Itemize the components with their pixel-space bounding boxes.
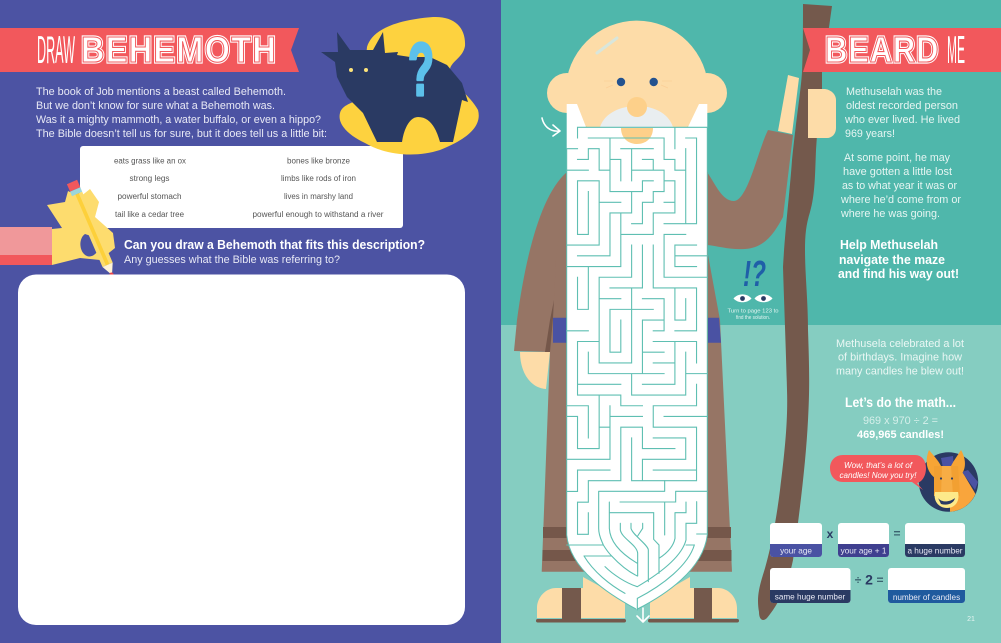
box: your age xyxy=(770,523,822,557)
muzzle xyxy=(935,492,959,508)
left sole xyxy=(536,619,626,622)
intro text: But we don’t know for sure what a Behemoth was. xyxy=(36,100,275,112)
text: about Methuselah: Methuselah was the xyxy=(846,86,942,98)
box: your age: your age xyxy=(780,546,812,556)
panel: description list xyxy=(80,146,403,228)
right strap xyxy=(694,588,712,619)
box: a huge number: a huge number xyxy=(907,546,963,556)
panel: left page background xyxy=(0,0,501,643)
icon: exclamation and question: !? xyxy=(743,253,766,294)
intro text: The Bible doesn’t tell us for sure, but it does tell us a little bit: xyxy=(36,128,327,140)
list items: powerful stomach xyxy=(118,192,182,201)
arrow: maze exit xyxy=(637,608,649,622)
moustache xyxy=(600,106,673,127)
robe xyxy=(542,172,732,572)
bubble text: candles! Now you try! xyxy=(840,471,917,480)
list card xyxy=(80,146,403,228)
ears xyxy=(927,450,965,480)
intro text: The book of Job mentions a beast called Behemoth. xyxy=(36,86,286,98)
head highlight xyxy=(597,38,617,53)
ribbon xyxy=(0,28,299,72)
ears xyxy=(547,73,727,113)
mane stripe xyxy=(962,470,978,490)
hint text: find the solution. xyxy=(736,315,770,321)
banner: beard me xyxy=(803,28,1001,72)
text: getting lost xyxy=(840,152,961,220)
bubble text: Wow, that’s a lot of xyxy=(844,461,913,470)
eyes xyxy=(617,78,658,86)
panel: blank drawing area xyxy=(18,274,465,625)
illustration: Methuselah figure xyxy=(514,21,799,623)
bubble shape xyxy=(830,455,926,490)
eyes xyxy=(940,477,953,480)
box: a huge number xyxy=(905,523,965,557)
badge xyxy=(919,452,978,512)
head xyxy=(934,466,960,496)
text: birthdays xyxy=(836,338,965,378)
text: maze call to action: and find his way out! xyxy=(838,267,959,281)
worksheet: first equation xyxy=(770,523,965,557)
maze straight walls xyxy=(567,127,707,534)
chin xyxy=(621,128,653,144)
beard xyxy=(567,104,707,610)
hand xyxy=(47,189,115,265)
icon: horse xyxy=(919,450,978,512)
nose xyxy=(627,97,647,117)
text: about Methuselah xyxy=(844,86,960,140)
sleeve shadow xyxy=(545,280,567,352)
text: math result: 469,965 candles! xyxy=(857,429,944,441)
finger gap xyxy=(80,234,97,256)
mouth xyxy=(938,498,955,505)
left foot xyxy=(537,577,625,618)
box: same huge number xyxy=(770,568,850,603)
list items: limbs like rods of iron xyxy=(281,174,356,183)
head highlight xyxy=(941,466,953,496)
bubble text xyxy=(840,461,917,480)
text: birthdays: many candles he blew out! xyxy=(836,366,964,378)
title word: beard: BEARD xyxy=(825,31,939,71)
panel: right page upper background xyxy=(501,0,1001,325)
operator: divide by two equals: 2 xyxy=(865,572,873,588)
heading: drawing prompt: Can you draw a Behemoth that fits this description? xyxy=(124,237,425,252)
left sleeve xyxy=(514,172,567,352)
right sole xyxy=(648,619,739,622)
mane xyxy=(941,456,954,468)
head xyxy=(566,21,708,135)
page number: 21 xyxy=(967,616,975,623)
maze curved walls xyxy=(567,481,707,610)
robe stripes xyxy=(542,527,732,561)
operator: divide by two equals xyxy=(855,572,884,588)
title word: beard outline: BEARD xyxy=(825,31,939,71)
creature eyes xyxy=(349,68,368,72)
sleeve xyxy=(0,227,52,255)
text: getting lost: At some point, he may xyxy=(844,152,950,164)
hint: solution page xyxy=(728,253,778,321)
eye wrinkles xyxy=(604,81,672,88)
pencil xyxy=(67,180,114,276)
neck xyxy=(950,468,976,512)
text: birthdays: of birthdays. Imagine how xyxy=(838,352,963,364)
panel: right page lower background xyxy=(501,325,1001,643)
text: math equation: 969 x 970 ÷ 2 = xyxy=(863,415,938,427)
right arm xyxy=(707,130,793,249)
icon: eyes xyxy=(734,294,772,302)
text: about Methuselah: oldest recorded person xyxy=(846,100,958,112)
box: your age plus one: your age + 1 xyxy=(841,546,887,556)
title word: behemoth: BEHEMOTH xyxy=(81,30,277,70)
sleeve cuff xyxy=(0,255,52,265)
worksheet: second equation xyxy=(770,568,965,603)
upper arm hand bar xyxy=(778,75,799,134)
belt xyxy=(553,318,721,343)
box: your age plus one xyxy=(838,523,889,557)
list items: tail like a cedar tree xyxy=(115,210,184,219)
hint text xyxy=(728,308,778,321)
text: maze call to action: navigate the maze xyxy=(839,253,945,267)
operator: times: x xyxy=(827,527,834,541)
intro text xyxy=(36,86,327,140)
icon: hand drawing with pencil xyxy=(0,180,115,276)
hint text: Turn to page 123 to xyxy=(728,308,778,314)
arrow: maze start xyxy=(542,118,560,136)
box: number of candles: number of candles xyxy=(893,593,960,602)
illustration: palm on staff xyxy=(808,89,836,138)
title word: behemoth outline: BEHEMOTH xyxy=(81,30,277,70)
text: maze call to action xyxy=(838,238,959,281)
intro text: Was it a mighty mammoth, a water buffalo, or even a hippo? xyxy=(36,114,321,126)
banner: draw behemoth: DRAW xyxy=(37,29,75,72)
text: birthdays: Methusela celebrated a lot xyxy=(836,338,965,350)
left strap xyxy=(562,588,581,619)
heading: let's do the math: Let’s do the math... xyxy=(845,395,956,410)
text: getting lost: where he was going. xyxy=(840,208,940,220)
text: maze call to action: Help Methuselah xyxy=(840,238,938,252)
question mark: ? xyxy=(408,28,434,111)
text: drawing sub-prompt: Any guesses what the Bible was referring to? xyxy=(124,254,340,266)
creature silhouette xyxy=(321,32,468,142)
text: getting lost: as to what year it was or xyxy=(842,180,957,192)
beard edge xyxy=(567,127,707,609)
yellow blob xyxy=(340,17,479,154)
left hand xyxy=(520,352,550,389)
list items: powerful enough to withstand a river xyxy=(252,210,384,219)
banner: draw behemoth xyxy=(0,28,299,72)
operator: divide by two equals: = xyxy=(876,573,884,587)
maze xyxy=(567,127,707,610)
operator: equals: = xyxy=(893,526,901,540)
text: about Methuselah: 969 years! xyxy=(845,128,895,140)
speech bubble xyxy=(830,455,926,490)
list items: lives in marshy land xyxy=(284,192,353,201)
text: about Methuselah: who ever lived. He lived xyxy=(844,114,960,126)
illustration: staff xyxy=(758,4,832,620)
text: getting lost: have gotten a little lost xyxy=(843,166,953,178)
ribbon xyxy=(803,28,1001,72)
text: getting lost: where he’d come from or xyxy=(840,194,961,206)
list items: bones like bronze xyxy=(287,156,350,165)
box: same huge number: same huge number xyxy=(775,592,846,602)
illustration: behemoth with question mark xyxy=(321,17,479,154)
list items xyxy=(114,156,384,219)
list items: strong legs xyxy=(130,174,170,183)
box: number of candles xyxy=(888,568,965,603)
list items: eats grass like an ox xyxy=(114,156,186,165)
operator: divide by two equals: ÷ xyxy=(855,573,862,587)
right foot xyxy=(650,577,737,618)
